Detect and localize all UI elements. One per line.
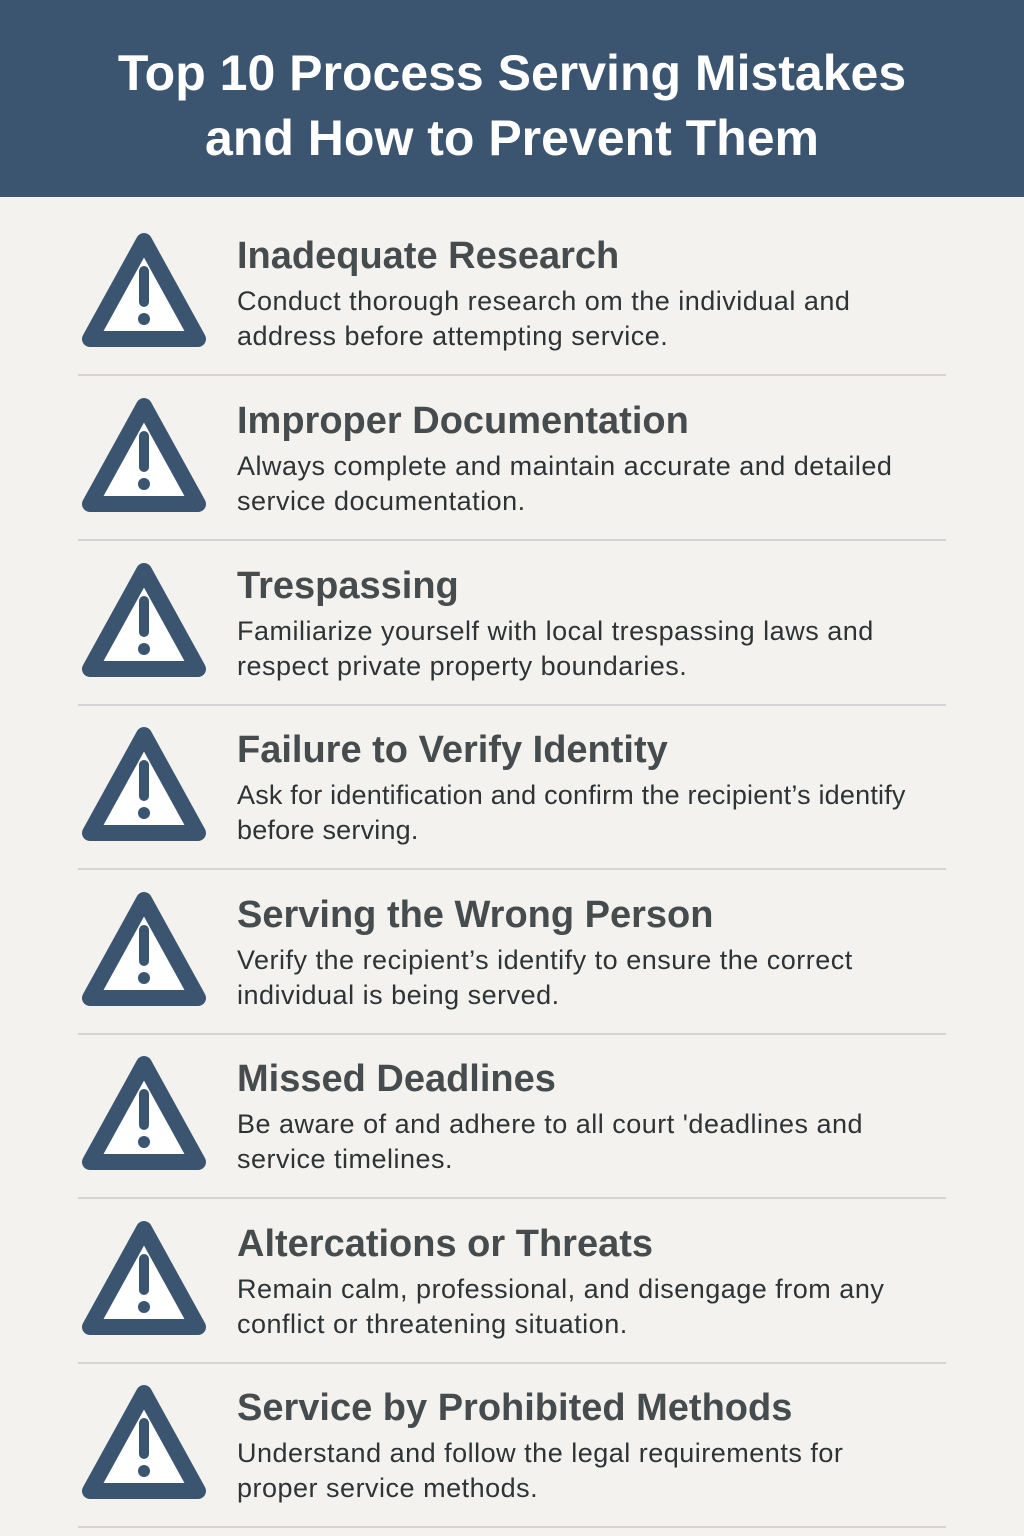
row 7 [78,1221,946,1364]
row 4 [78,727,946,870]
text: Verify the recipient’s identify to ensure the correct [237,945,853,975]
title: Trespassing [237,565,459,607]
row 8 [78,1385,946,1528]
text: Conduct thorough research om the individual and [237,286,850,316]
icon: warning [82,563,206,677]
title: Service by Prohibited Methods [237,1387,792,1429]
text: before serving. [237,815,419,845]
text: service documentation. [237,486,526,516]
title: Failure to Verify Identity [237,729,668,771]
text [237,945,853,1010]
text: address before attempting service. [237,321,668,351]
text [237,451,892,516]
icon: warning [82,233,206,347]
icon: warning [82,727,206,841]
text [237,780,906,845]
icon: warning [82,1385,206,1499]
title: Inadequate Research [237,235,619,277]
row 6 [78,1056,946,1199]
text: Understand and follow the legal requirements for [237,1438,843,1468]
icon: warning [82,398,206,512]
text [237,616,874,681]
text: individual is being served. [237,980,560,1010]
text [237,1438,843,1503]
text [237,1109,863,1174]
title: Missed Deadlines [237,1058,556,1100]
text: Remain calm, professional, and disengage from any [237,1274,884,1304]
text: Be aware of and adhere to all court 'deadlines and [237,1109,863,1139]
text [237,286,850,351]
title: Serving the Wrong Person [237,894,713,936]
text: Always complete and maintain accurate and detailed [237,451,892,481]
header [0,0,1024,197]
text: proper service methods. [237,1473,538,1503]
title: Improper Documentation [237,400,689,442]
text: Familiarize yourself with local trespassing laws and [237,616,874,646]
row 5 [78,892,946,1035]
text: respect private property boundaries. [237,651,687,681]
row 2 [78,398,946,541]
text: conflict or threatening situation. [237,1309,628,1339]
header: Top 10 Process Serving Mistakes [118,45,906,101]
icon: warning [82,1221,206,1335]
icon: warning [82,1056,206,1170]
text: Ask for identification and confirm the recipient’s identify [237,780,906,810]
text: service timelines. [237,1144,453,1174]
row 3 [78,563,946,706]
row 1 [78,233,946,376]
icon: warning [82,892,206,1006]
text [237,1274,884,1339]
header: and How to Prevent Them [205,110,819,166]
title: Altercations or Threats [237,1223,653,1265]
